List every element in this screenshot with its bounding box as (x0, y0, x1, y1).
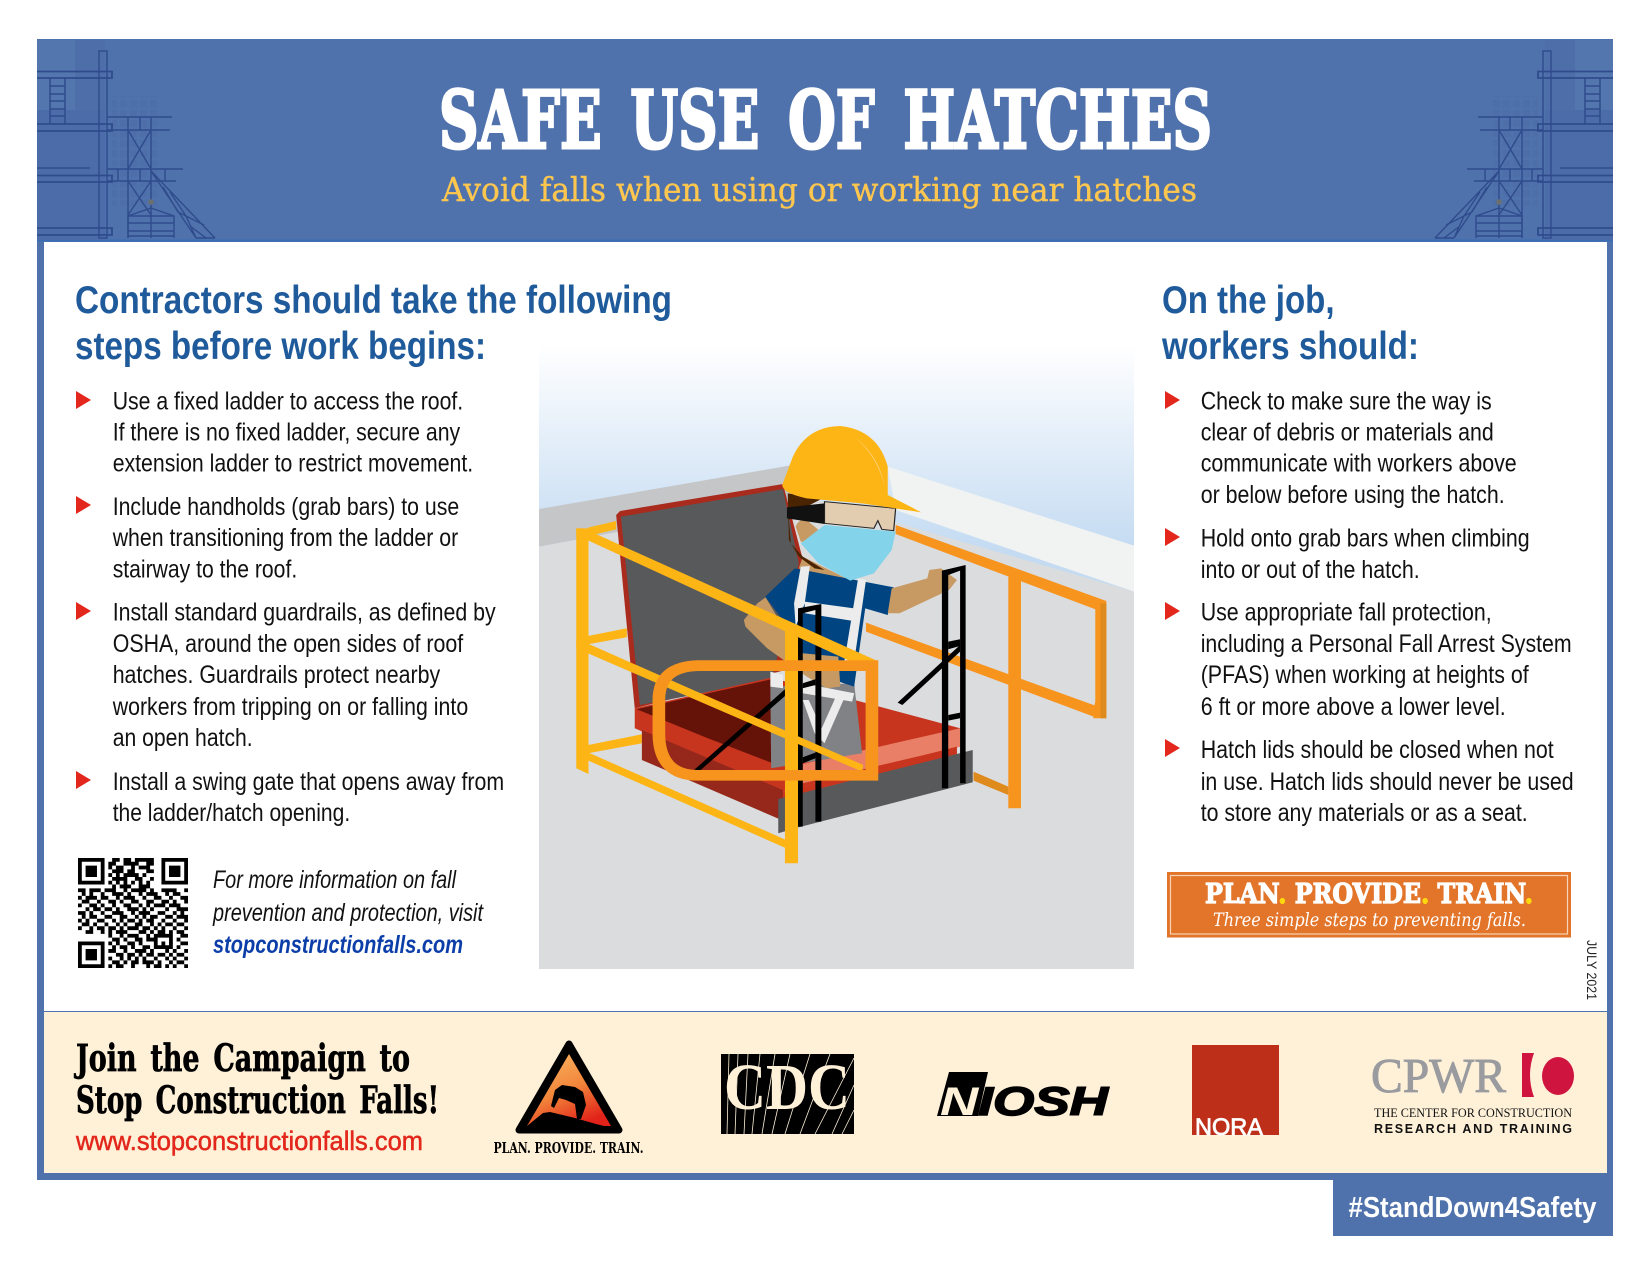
text block: more information: prevention and protection, visit (212, 900, 484, 927)
bullet worker 4 (1165, 739, 1180, 757)
campaign heading: Join the Campaign to (74, 1036, 410, 1080)
logo: CPWR: THE CENTER FOR CONSTRUCTION (1374, 1106, 1572, 1120)
logo: CPWR (1371, 1048, 1574, 1136)
worker 3 text (1201, 600, 1572, 721)
black ladder rails (694, 565, 966, 827)
worker 4 text: Hatch lids should be closed when not (1201, 737, 1554, 764)
text block: more information (212, 867, 484, 959)
worker 3 text: Use appropriate fall protection, (1201, 600, 1492, 626)
illustration: worker climbing out of hatch (539, 345, 1134, 969)
step 1 text: extension ladder to restrict movement. (113, 450, 473, 478)
heading: contractors: steps before work begins: (75, 325, 486, 368)
campaign heading (74, 1036, 439, 1122)
icon: QR code (78, 860, 188, 966)
text block: more information: For more information on fall (213, 867, 457, 894)
step 2 text: when transitioning from the ladder or (112, 525, 458, 552)
decoration: scaffolding right (1435, 40, 1613, 240)
step 3 text (112, 600, 496, 752)
decoration: scaffolding left (37, 40, 215, 240)
worker 3 text: including a Personal Fall Arrest System (1201, 631, 1572, 658)
worker 1 text: Check to make sure the way is (1201, 388, 1492, 416)
bullet worker 3 (1165, 602, 1180, 620)
bullet worker 1 (1165, 391, 1180, 409)
heading: workers (1161, 279, 1419, 368)
orange swing gate (659, 666, 872, 775)
worker 1 text: clear of debris or materials and (1201, 420, 1494, 446)
worker 2 text: into or out of the hatch. (1201, 557, 1420, 584)
hashtag box (1333, 1180, 1613, 1236)
badge: plan provide train: PLAN. PROVIDE. TRAIN. (1205, 879, 1533, 910)
roof floor (539, 497, 1134, 969)
step 3 text: hatches. Guardrails protect nearby (113, 662, 441, 689)
step 4 text (113, 769, 504, 827)
bullet step 2 (76, 496, 91, 514)
heading: workers: On the job, (1162, 279, 1334, 322)
worker 1 text (1201, 388, 1517, 509)
bullet step 4 (76, 771, 91, 789)
logo: NORA (1192, 1045, 1279, 1141)
step 3 text: an open hatch. (113, 725, 253, 752)
worker 4 text: to store any materials or as a seat. (1201, 800, 1528, 827)
worker 3 text: (PFAS) when working at heights of (1201, 662, 1529, 689)
heading: contractors: Contractors should take the following (75, 279, 672, 322)
text block: more information: stopconstructionfalls.com (213, 932, 463, 959)
badge: plan provide train: Three simple steps to preventing falls. (1213, 909, 1526, 931)
title: SAFE USE OF HATCHES (439, 73, 1212, 167)
bullet step 3 (76, 602, 91, 620)
worker 1 text: or below before using the hatch. (1201, 482, 1505, 509)
bullet step 1 (76, 391, 91, 409)
parapet right (888, 467, 1134, 592)
logo: CPWR: CPWR (1371, 1048, 1506, 1103)
step 4 text: the ladder/hatch opening. (113, 800, 350, 827)
worker 1 text: communicate with workers above (1201, 450, 1517, 478)
logo: NORA: NORA (1195, 1114, 1263, 1141)
step 2 text: stairway to the roof. (113, 556, 297, 584)
list: contractor steps (76, 388, 504, 827)
logo: NIOSH (937, 1072, 1109, 1124)
date stamp: JULY 2021 (1584, 940, 1599, 1000)
step 2 text (112, 494, 459, 584)
hashtag box: #StandDown4Safety (1348, 1192, 1596, 1224)
step 2 text: Include handholds (grab bars) to use (113, 494, 459, 521)
step 1 text (113, 388, 473, 478)
step 1 text: Use a fixed ladder to access the roof. (113, 388, 463, 416)
worker 2 text: Hold onto grab bars when climbing (1201, 526, 1530, 552)
campaign heading: Stop Construction Falls! (76, 1078, 439, 1122)
campaign url: www.stopconstructionfalls.com (75, 1126, 423, 1156)
badge: plan provide train (1167, 872, 1571, 938)
worker 4 text (1201, 737, 1574, 827)
back guardrails (588, 521, 1106, 808)
step 3 text: workers from tripping on or falling into (112, 694, 468, 721)
bullet worker 2 (1165, 528, 1180, 546)
logo: CDC: CDC (724, 1051, 850, 1124)
panel: header banner (37, 40, 1613, 240)
hatch curb (635, 678, 973, 833)
logo: plan provide train triangle: PLAN. PROVIDE. TRAIN. (494, 1140, 644, 1157)
worker 2 text (1201, 526, 1530, 584)
subtitle: Avoid falls when using or working near hatches (441, 170, 1197, 209)
logo: CPWR: RESEARCH AND TRAINING (1374, 1122, 1572, 1136)
heading: workers: workers should: (1161, 325, 1419, 368)
worker 3 text: 6 ft or more above a lower level. (1201, 694, 1506, 721)
sky and roof background (539, 345, 1134, 969)
parapet left (539, 465, 807, 547)
step 1 text: If there is no fixed ladder, secure any (113, 420, 461, 446)
open hatch lid (616, 484, 805, 708)
panel: campaign footer (74, 1036, 1574, 1157)
heading: contractors (75, 279, 672, 368)
front yellow guardrail (576, 528, 877, 863)
step 3 text: Install standard guardrails, as defined by (113, 600, 496, 626)
worker (744, 426, 957, 768)
logo: NIOSH: NIOSH (940, 1080, 1109, 1124)
worker 4 text: in use. Hatch lids should never be used (1201, 769, 1574, 796)
step 3 text: OSHA, around the open sides of roof (113, 631, 463, 658)
step 4 text: Install a swing gate that opens away from (113, 769, 504, 796)
list: worker steps (1165, 388, 1574, 827)
logo: plan provide train triangle (494, 1044, 644, 1157)
